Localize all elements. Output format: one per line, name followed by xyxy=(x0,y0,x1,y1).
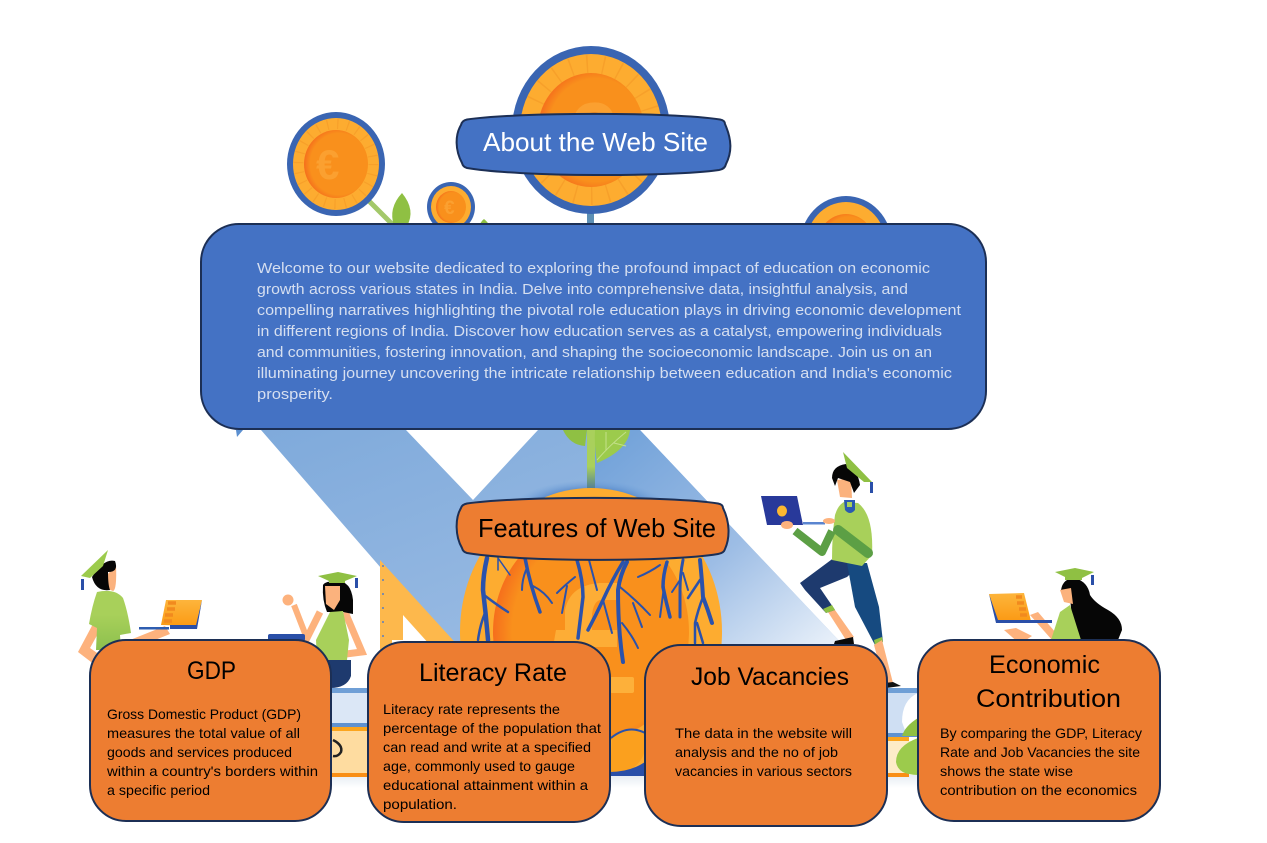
heading: About the Web Site: About the Web Site xyxy=(483,127,708,157)
panel: GDP: goods and services produced xyxy=(107,744,292,760)
panel: about description: compelling narratives highlighting the pivotal role education plays in driving economic development xyxy=(257,302,962,319)
panel: Economic Contribution: shows the state wise xyxy=(940,763,1073,779)
illustration: student with long hair and laptop xyxy=(989,568,1122,644)
panel: Literacy Rate: educational attainment within a xyxy=(383,777,588,793)
panel: about description: Welcome to our website dedicated to exploring the profound impact of education on economic xyxy=(257,260,931,277)
panel: Economic Contribution xyxy=(918,640,1160,821)
panel: Job Vacancies xyxy=(645,645,887,826)
panel: GDP: Gross Domestic Product (GDP) xyxy=(107,706,301,722)
panel: Economic Contribution: Rate and Job Vacancies the site xyxy=(940,744,1140,760)
icon: right coin behind panel xyxy=(800,196,892,294)
panel: about description: illuminating journey uncovering the intricate relationship between education and India's economic xyxy=(257,365,953,382)
icon: large central coin on stem xyxy=(512,46,670,226)
panel: Literacy Rate: age, commonly used to gauge xyxy=(383,758,575,774)
panel: about description: in different regions of India. Discover how education serves as a catalyst, empowering individuals xyxy=(257,323,942,340)
panel: about description: and communities, fostering innovation, and shaping the socioeconomic landscape. Join us on an xyxy=(257,344,932,361)
heading: About the Web Site xyxy=(457,114,730,175)
panel: Economic Contribution: By comparing the GDP, Literacy xyxy=(940,725,1142,741)
panel: Economic Contribution: contribution on the economics xyxy=(940,782,1137,798)
icon: small euro coin: € xyxy=(444,198,455,219)
panel: GDP: a specific period xyxy=(107,782,210,798)
panel: GDP: within a country's borders within xyxy=(106,763,318,779)
background blue diagonal bands xyxy=(236,430,845,655)
panel: Literacy Rate: can read and write at a specified xyxy=(383,739,591,755)
heading: Features of Web Site xyxy=(457,498,729,560)
panel: GDP: measures the total value of all xyxy=(107,725,300,741)
icon: large orange coin with roots xyxy=(460,488,722,776)
panel: Job Vacancies: Job Vacancies xyxy=(691,663,849,691)
illustration: student with orange laptop (left) xyxy=(78,550,202,665)
illustration: student climbing with blue laptop xyxy=(761,452,901,688)
panel: Job Vacancies: The data in the website will xyxy=(675,725,852,741)
panel: Economic Contribution: Contribution xyxy=(976,685,1121,713)
panel: about description: growth across various states in India. Delve into comprehensive data, insightful analysis, and xyxy=(257,281,908,298)
icon: sprout with leaves xyxy=(510,428,670,544)
panel: Literacy Rate: percentage of the population that xyxy=(383,720,601,736)
icon: left euro coin with stem and leaf xyxy=(287,112,411,228)
books stack and shadow xyxy=(300,688,940,788)
panel: GDP xyxy=(90,640,331,821)
icon: triangle ruler xyxy=(380,560,462,700)
panel: Literacy Rate: population. xyxy=(383,796,457,812)
panel: Literacy Rate xyxy=(368,642,610,822)
illustration: student with raised fist xyxy=(268,572,362,688)
panel: about description: prosperity. xyxy=(257,386,333,403)
panel: Literacy Rate: Literacy rate represents the xyxy=(383,701,560,717)
panel: Literacy Rate: Literacy Rate xyxy=(419,659,567,687)
panel: Economic Contribution: Economic xyxy=(989,651,1100,679)
icon: large central coin on stem: € xyxy=(566,85,616,185)
panel: Job Vacancies: analysis and the no of job xyxy=(675,744,838,760)
heading: Features of Web Site: Features of Web Site xyxy=(478,513,716,543)
icon: small euro coin xyxy=(427,182,488,232)
panel: about description xyxy=(201,224,986,429)
panel: GDP: GDP xyxy=(187,657,236,685)
panel: Job Vacancies: vacancies in various sectors xyxy=(675,763,852,779)
icon: left euro coin with stem and leaf: € xyxy=(316,141,339,188)
